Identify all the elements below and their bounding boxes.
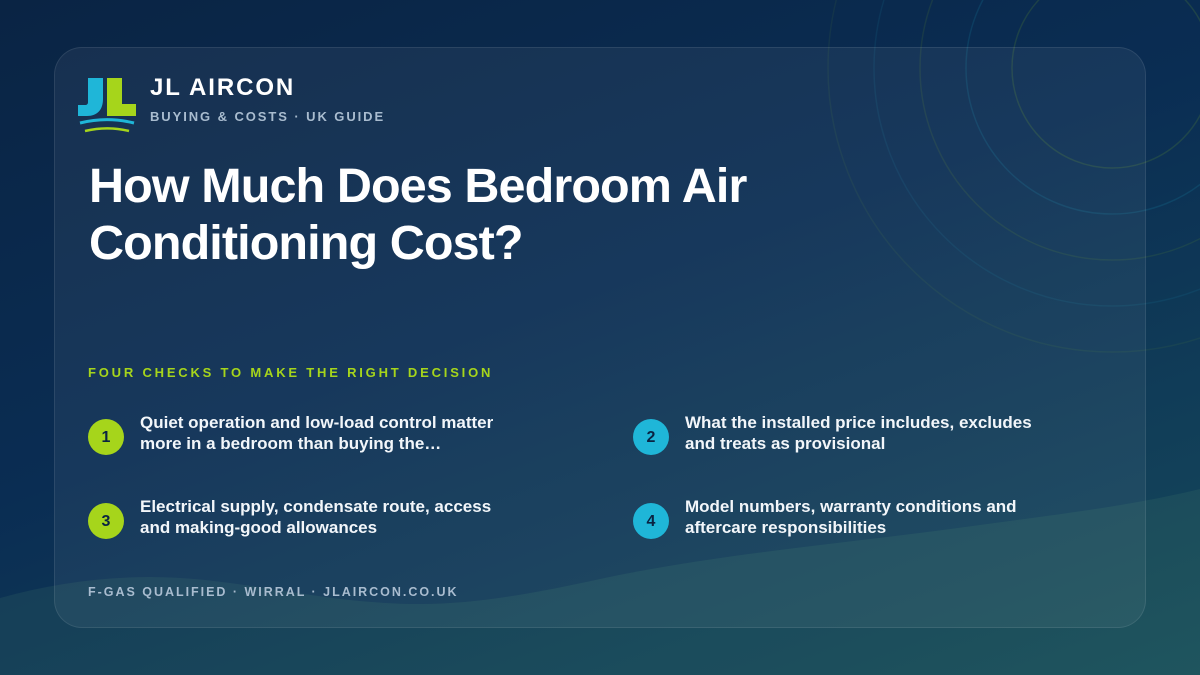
brand subtitle: BUYING & COSTS · UK GUIDE <box>150 109 385 124</box>
title: Conditioning Cost? <box>89 216 523 270</box>
concentric rings <box>828 0 1200 352</box>
check 1 <box>88 413 493 455</box>
badge 3: 3 <box>102 513 110 530</box>
arc green <box>85 128 129 131</box>
check 3 text: and making-good allowances <box>140 518 377 537</box>
badge 4 <box>633 503 669 539</box>
title <box>89 159 747 270</box>
badge 2 <box>633 419 669 455</box>
check 3 <box>88 497 491 539</box>
wave <box>0 489 1200 675</box>
badge 3 <box>88 503 124 539</box>
badge 2: 2 <box>647 429 655 446</box>
section heading: FOUR CHECKS TO MAKE THE RIGHT DECISION <box>88 365 493 380</box>
badge 4: 4 <box>647 513 655 530</box>
panel: main card <box>54 47 1146 628</box>
arc blue <box>80 120 134 123</box>
check 2 <box>633 413 1032 455</box>
check 1 text <box>140 413 493 453</box>
check 2 text: and treats as provisional <box>685 434 885 453</box>
check 2 text: What the installed price includes, excludes <box>685 413 1032 432</box>
letter L <box>107 78 136 116</box>
check 3 text: Electrical supply, condensate route, access <box>140 497 491 516</box>
check 4 text: Model numbers, warranty conditions and <box>685 497 1017 516</box>
check 2 text <box>685 413 1032 453</box>
check 1 text: Quiet operation and low-load control matter <box>140 413 493 432</box>
check 4 <box>633 497 1017 539</box>
check 4 text: aftercare responsibilities <box>685 518 886 537</box>
check 1 text: more in a bedroom than buying the… <box>140 434 441 453</box>
logo <box>78 78 136 132</box>
badge 1 <box>88 419 124 455</box>
badge 1: 1 <box>102 429 110 446</box>
letter J <box>78 78 103 116</box>
footer: F-GAS QUALIFIED · WIRRAL · JLAIRCON.CO.UK <box>88 585 459 599</box>
brand name: JL AIRCON <box>150 74 295 101</box>
check 4 text <box>685 497 1017 537</box>
title: How Much Does Bedroom Air <box>89 159 746 213</box>
check 3 text <box>140 497 491 537</box>
